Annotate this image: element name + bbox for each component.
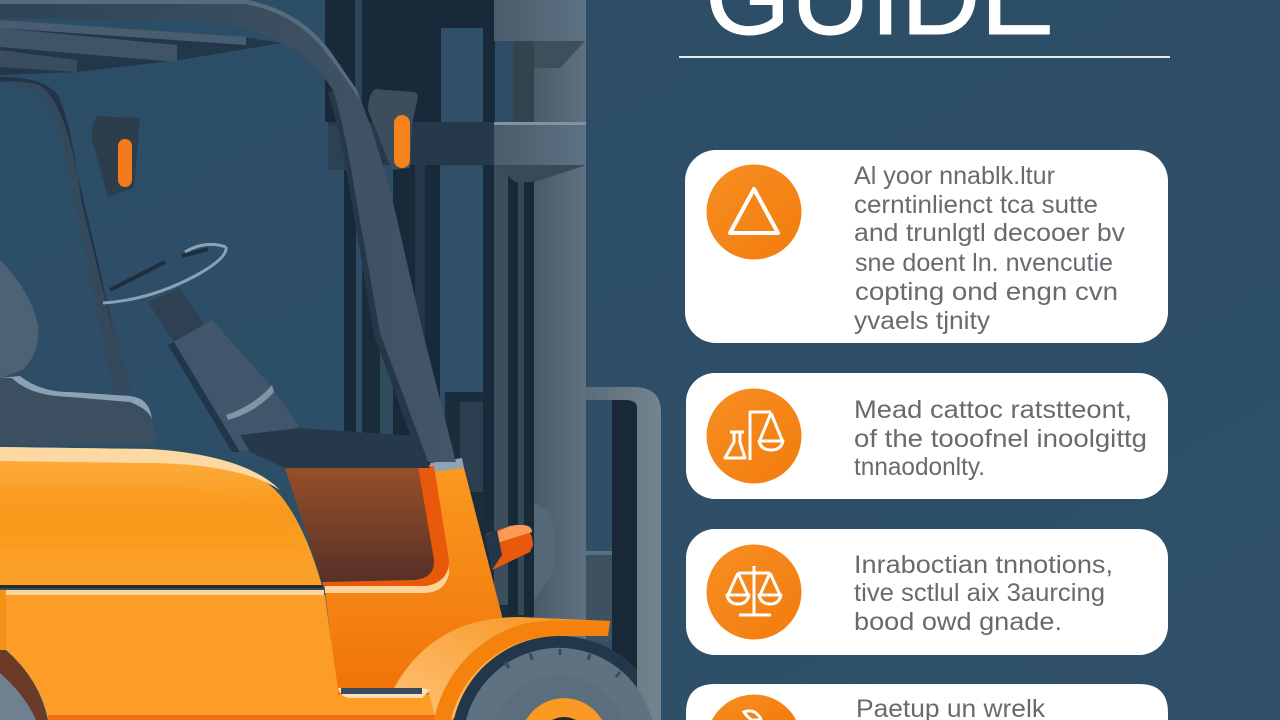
fork carriage bbox=[586, 387, 661, 720]
card 4 bbox=[686, 684, 1168, 720]
grab handle bbox=[485, 525, 533, 570]
card 1 text: cerntinlienct tca sutte bbox=[854, 191, 1098, 219]
card 2 text: Mead cattoc ratstteont, bbox=[854, 396, 1132, 424]
icon: balance scale bbox=[706, 544, 802, 640]
card 1 text: and trunlgtl decooer bv bbox=[854, 219, 1126, 247]
steering column bbox=[168, 320, 300, 452]
rear pillar bbox=[0, 77, 132, 392]
card 2 bbox=[686, 373, 1168, 499]
icon: warning triangle bbox=[706, 164, 802, 260]
card 3 text: tive sctlul aix 3aurcing bbox=[854, 579, 1105, 607]
card 1 bbox=[685, 150, 1168, 343]
card 1 text bbox=[854, 162, 1126, 335]
card 1 text: sne doent ln. nvencutie bbox=[855, 249, 1113, 277]
card 2 text: of the tooofnel inoolgittg bbox=[854, 425, 1147, 453]
seat bbox=[0, 260, 156, 445]
card 1 text: yvaels tjnity bbox=[854, 307, 991, 335]
dashboard bbox=[240, 428, 430, 468]
cab roof and front pillar bbox=[0, 0, 456, 462]
fender bbox=[394, 617, 610, 720]
card 1 text: copting ond engn cvn bbox=[855, 278, 1118, 306]
card 3 text: bood owd gnade. bbox=[854, 608, 1062, 636]
left mirror bbox=[92, 116, 140, 197]
orange body side bbox=[285, 458, 505, 720]
icon: leaf bbox=[712, 694, 796, 720]
hood bbox=[0, 447, 324, 595]
card 1 text: Al yoor nnablk.ltur bbox=[854, 162, 1055, 190]
card 2 text: tnnaodonlty. bbox=[854, 453, 985, 481]
card 3 text: Inraboctian tnnotions, bbox=[854, 551, 1113, 579]
body notch bbox=[338, 688, 430, 698]
right mirror bbox=[368, 89, 418, 170]
steering wheel bbox=[103, 244, 226, 345]
lower body panel bbox=[0, 590, 465, 720]
card 3 text bbox=[854, 551, 1113, 636]
card 3 bbox=[686, 529, 1168, 655]
mast bbox=[325, 0, 586, 650]
title rule bbox=[679, 56, 1170, 58]
rear wheel bbox=[0, 647, 47, 720]
icon: scale and flask bbox=[706, 388, 802, 484]
card 2 text bbox=[854, 396, 1147, 481]
front wheel bbox=[454, 636, 652, 720]
forklift illustration bbox=[0, 0, 661, 720]
